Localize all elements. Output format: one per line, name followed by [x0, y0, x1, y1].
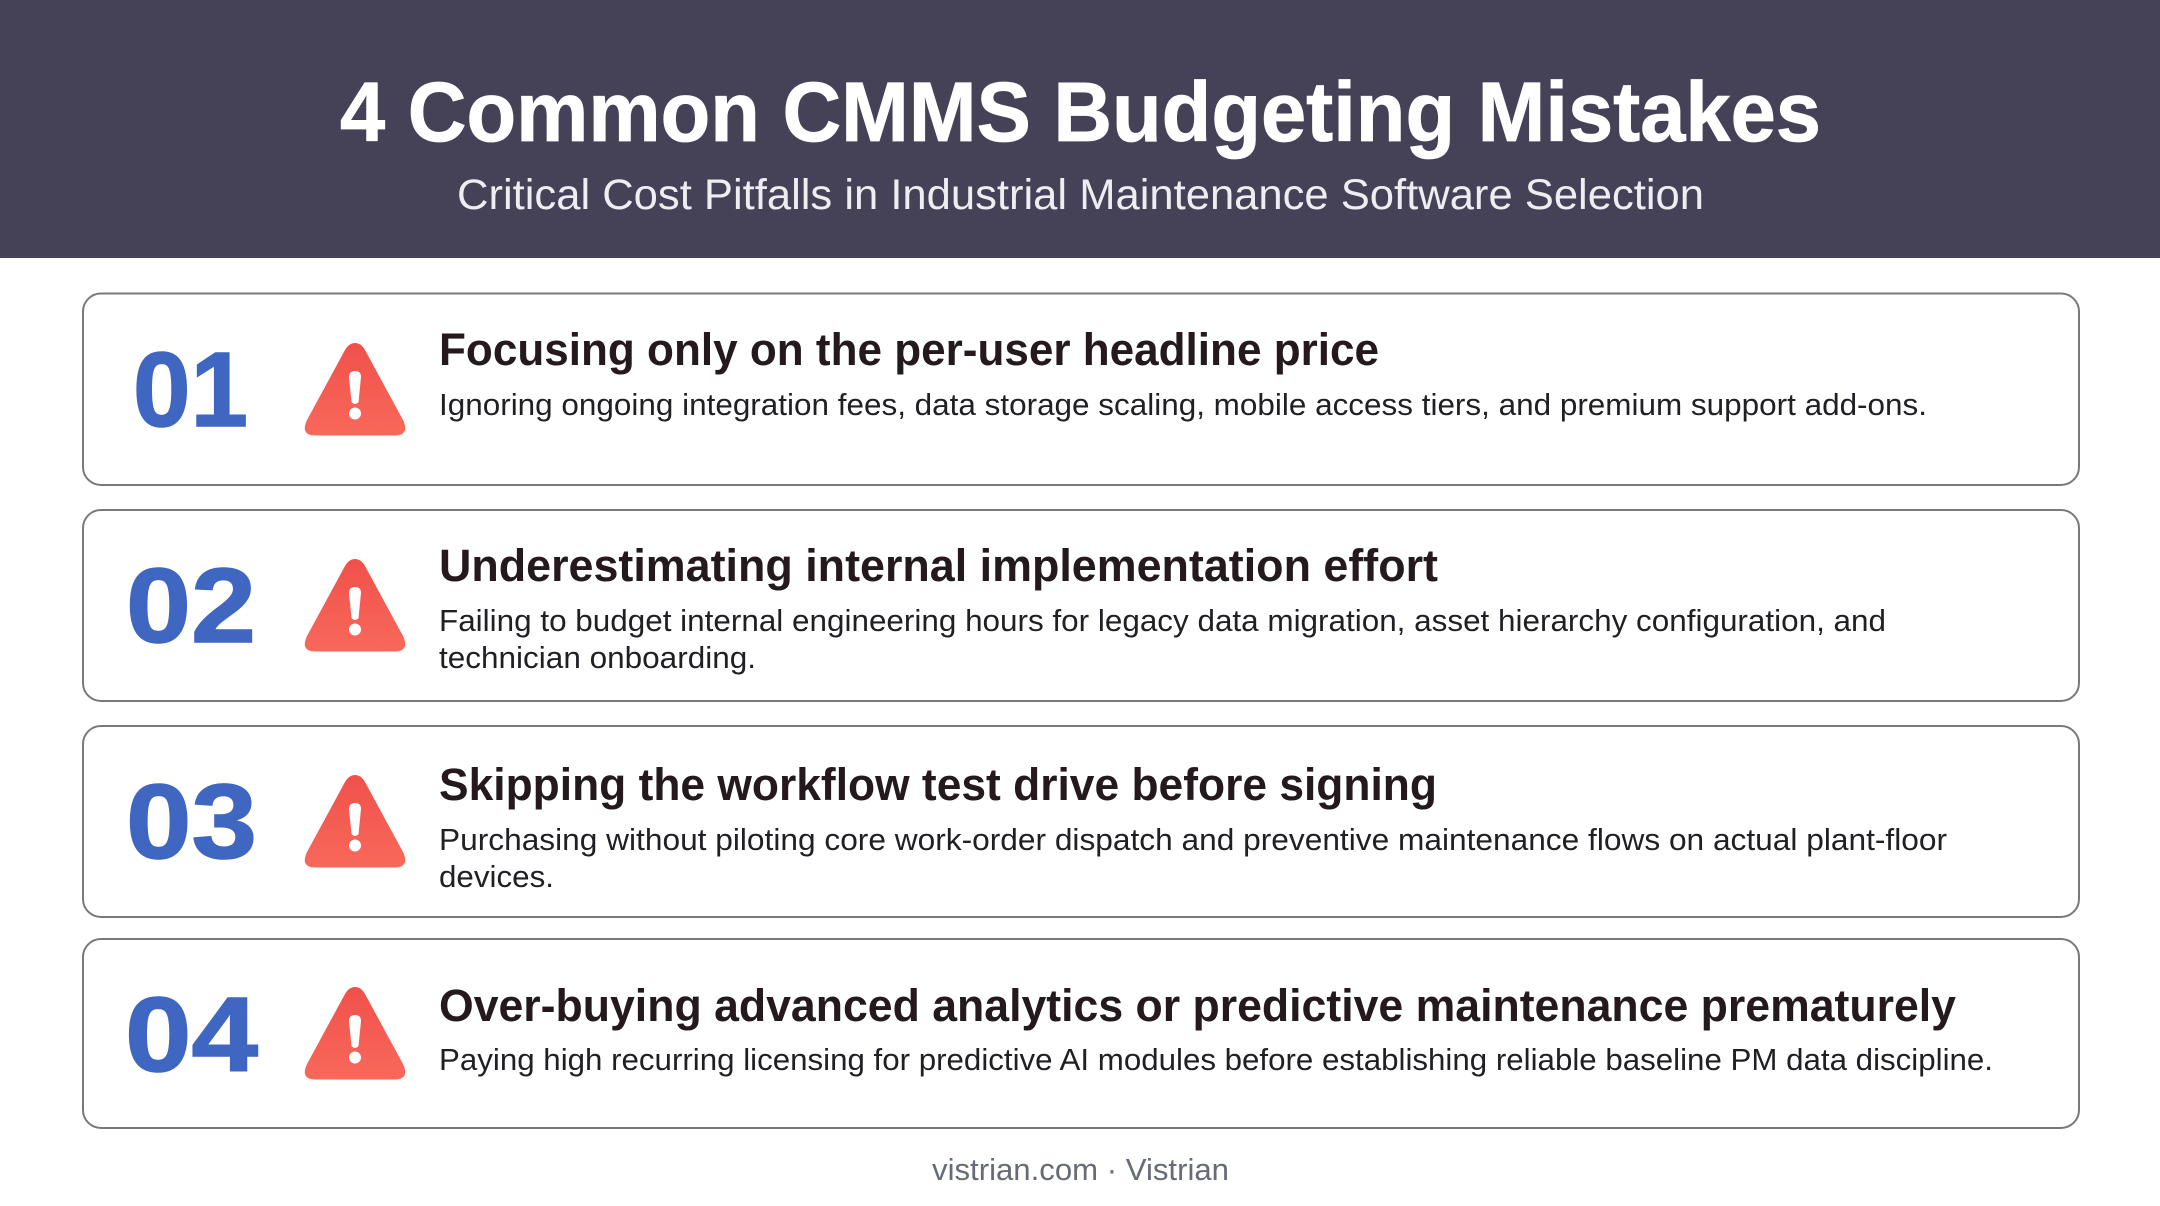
description 03: devices.	[439, 859, 554, 894]
icon: warning triangle	[305, 559, 405, 652]
description 02: technician onboarding.	[439, 640, 756, 675]
heading 03: Skipping the workflow test drive before signing	[439, 759, 1437, 810]
icon: warning triangle	[305, 775, 405, 868]
panel: mistake 03	[83, 726, 2079, 917]
number 03: 03	[126, 763, 257, 881]
panel: mistake 04	[83, 939, 2079, 1128]
subtitle: Critical Cost Pitfalls in Industrial Maintenance Software Selection	[457, 171, 1704, 219]
description 03: Purchasing without piloting core work-order dispatch and preventive maintenance flows on actual plant-floor	[439, 822, 1947, 857]
header band	[0, 0, 2160, 258]
number 02: 02	[126, 547, 256, 665]
description 01: Ignoring ongoing integration fees, data storage scaling, mobile access tiers, and premium support add-ons.	[439, 387, 1927, 422]
panel: mistake 02	[83, 510, 2079, 701]
footer: vistrian.com · Vistrian	[932, 1152, 1229, 1187]
title: 4 Common CMMS Budgeting Mistakes	[340, 65, 1821, 159]
description 03	[439, 822, 1947, 894]
heading 01: Focusing only on the per-user headline price	[439, 324, 1379, 375]
number 01: 01	[133, 331, 248, 449]
heading 02: Underestimating internal implementation effort	[439, 540, 1438, 591]
description 02	[439, 603, 1886, 675]
icon: warning triangle	[305, 987, 405, 1080]
description 04: Paying high recurring licensing for predictive AI modules before establishing reliable baseline PM data discipline.	[439, 1042, 1993, 1077]
heading 04: Over-buying advanced analytics or predictive maintenance prematurely	[439, 980, 1956, 1031]
icon: warning triangle	[305, 343, 405, 436]
number 04: 04	[125, 976, 258, 1094]
description 02: Failing to budget internal engineering hours for legacy data migration, asset hierarchy configuration, and	[439, 603, 1886, 638]
panel: mistake 01	[83, 294, 2079, 485]
